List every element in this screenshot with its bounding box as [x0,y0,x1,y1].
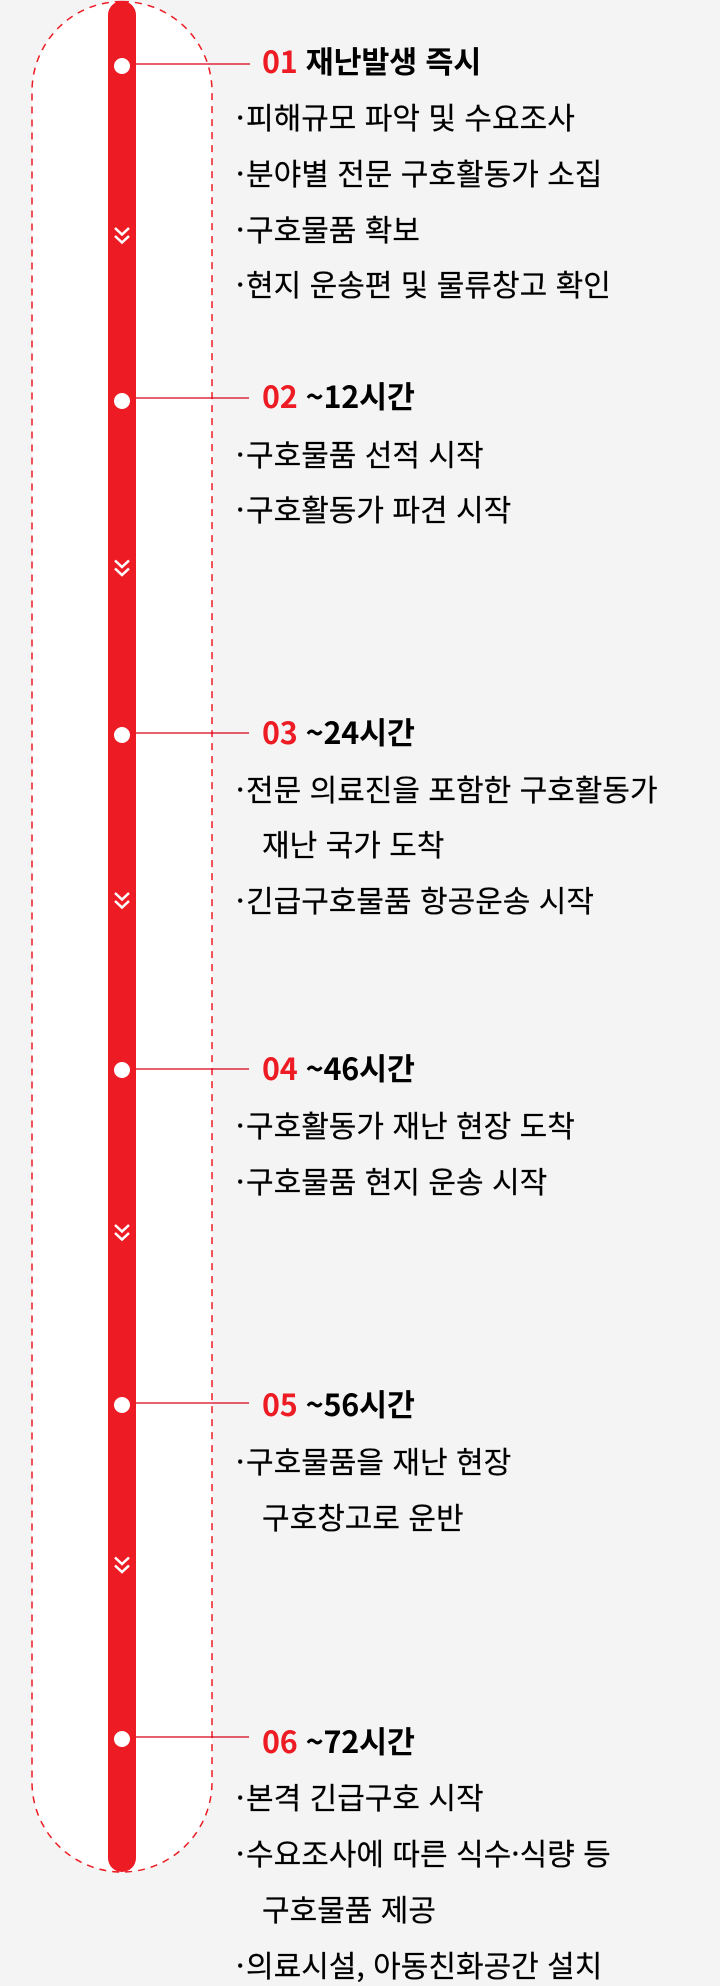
panel: step 03 [236,709,658,921]
heading 01: 01 재난발생 즉시 [262,38,481,82]
item: local transport start: 구호물품 현지 운송 시작 [246,1158,547,1202]
panel: step 01: · [236,261,244,305]
item: relief teams: 분야별 전문 구호활동가 소집 [246,150,602,194]
panel: step 01: · [236,94,244,138]
red vertical bar [108,1,136,1872]
item: full relief: 본격 긴급구호 시작 [246,1774,484,1818]
item: relief goods: 구호물품 확보 [246,206,420,250]
panel: step 02: · [236,431,244,475]
panel: step 04 [236,1045,575,1202]
heading 05: 05 ~56시간 [262,1381,415,1425]
item: food supply: 수요조사에 따른 식수·식량 등 [246,1830,611,1874]
item: damage survey: 피해규모 파악 및 수요조사 [246,94,575,138]
heading 06: 06 ~72시간 [262,1718,415,1762]
panel: step 04: · [236,1158,244,1202]
panel: step 02: · [236,486,244,530]
connector lines and dots [114,58,250,1747]
chevron arrows [115,228,129,1572]
panel: step 01: · [236,150,244,194]
panel: step 06: · [236,1942,244,1986]
panel: step 06: · [236,1830,244,1874]
item: shipping: 구호물품 선적 시작 [246,431,484,475]
item: carry goods: 구호물품을 재난 현장 [246,1438,511,1482]
heading 02: 02 ~12시간 [262,373,415,417]
heading 03: 03 ~24시간 [262,709,415,753]
item: facilities: 의료시설, 아동친화공간 설치 [246,1942,602,1986]
heading 04: 04 ~46시간 [262,1045,415,1089]
item: dispatch: 구호활동가 파견 시작 [246,486,511,530]
item: local transport: 현지 운송편 및 물류창고 확인 [246,261,611,305]
item: medical staff: 전문 의료진을 포함한 구호활동가 [246,766,658,810]
panel: step 06: · [236,1774,244,1818]
panel: step 02 [236,373,511,530]
panel: step 03: · [236,877,244,921]
item: arrival on site: 구호활동가 재난 현장 도착 [246,1102,575,1146]
panel: step 01: · [236,206,244,250]
panel: step 01 [236,38,611,305]
panel: step 05 [236,1381,511,1538]
panel: step 06 [236,1718,611,1986]
item: air transport: 긴급구호물품 항공운송 시작 [246,877,594,921]
dashed capsule panel [32,2,212,1872]
panel: step 05: · [236,1438,244,1482]
item: food supply continued: 구호물품 제공 [262,1886,436,1930]
panel: step 04: · [236,1102,244,1146]
item: medical staff continued: 재난 국가 도착 [262,821,444,865]
panel: step 03: · [236,766,244,810]
item: carry goods continued: 구호창고로 운반 [262,1494,464,1538]
